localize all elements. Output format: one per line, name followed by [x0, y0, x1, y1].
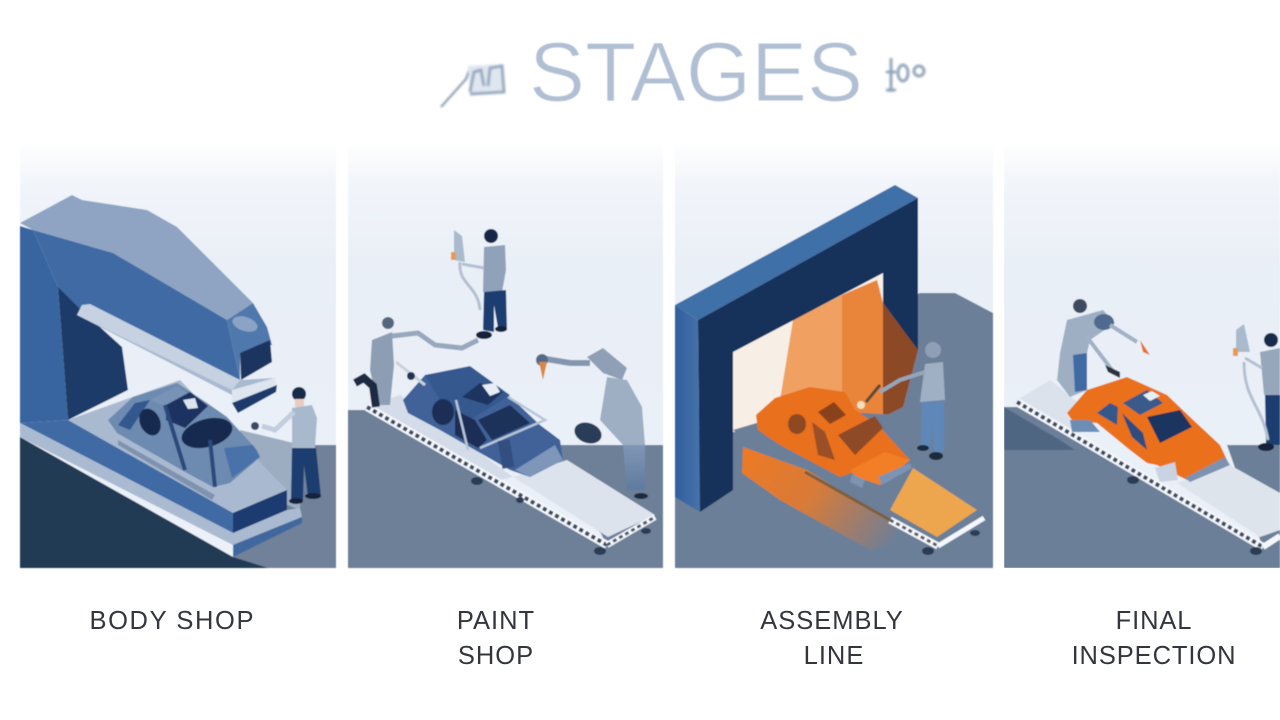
conveyor belt: [367, 395, 655, 555]
press nose: [227, 303, 272, 380]
panel: paint shop: [348, 140, 663, 568]
orange car: [756, 387, 912, 488]
car body frame: [108, 383, 260, 500]
icon: right title ornament: [886, 58, 924, 92]
doorway: [733, 273, 920, 480]
floor: [675, 293, 993, 568]
top worker: [451, 229, 507, 339]
arch top: [675, 185, 918, 320]
arch: [675, 185, 918, 512]
label: final inspection: INSPECTION: [1072, 642, 1236, 670]
label: body shop: BODY SHOP: [90, 607, 254, 635]
label: assembly line: LINE: [804, 642, 864, 670]
floor: [1004, 407, 1280, 568]
press machine: [20, 195, 277, 423]
icon: left title ornament: [441, 64, 505, 107]
label: final inspection: FINAL: [1116, 607, 1192, 635]
arch front: [698, 198, 918, 512]
panel: body shop: [20, 140, 336, 568]
title: [441, 25, 924, 119]
panel background: [1004, 167, 1280, 540]
panel background: [675, 140, 993, 568]
conveyor belt: [805, 468, 984, 555]
base end: [233, 490, 287, 533]
worker: [251, 387, 321, 504]
painter: [857, 342, 945, 460]
right robot arm: [536, 348, 648, 499]
base top: [68, 380, 287, 513]
press plate: [77, 305, 276, 395]
inspector right: [1233, 324, 1280, 451]
base lip: [20, 423, 302, 545]
press column: [20, 226, 68, 423]
left worker and arm: [355, 317, 478, 407]
title text: STAGES: [529, 25, 863, 119]
panel: assembly line: [675, 140, 993, 568]
panel: final inspection: [1004, 140, 1280, 568]
press head: [33, 230, 240, 380]
label: assembly line: ASSEMBLY: [760, 607, 904, 635]
arch left side: [675, 305, 700, 512]
floor: [233, 445, 336, 568]
floor paint glow: [742, 447, 897, 550]
label: paint shop: SHOP: [458, 642, 534, 670]
press top face: [20, 195, 253, 320]
machine base: [20, 380, 302, 557]
base front: [20, 420, 233, 533]
floor: [348, 410, 663, 568]
orange car: [1067, 377, 1230, 482]
inspector left: [1057, 299, 1150, 397]
panel background: [348, 140, 663, 568]
panel background: [20, 140, 336, 568]
blue car: [403, 366, 563, 477]
inner dark wall: [58, 287, 128, 420]
label: paint shop: PAINT: [457, 607, 535, 635]
conveyor belt: [1017, 380, 1280, 555]
